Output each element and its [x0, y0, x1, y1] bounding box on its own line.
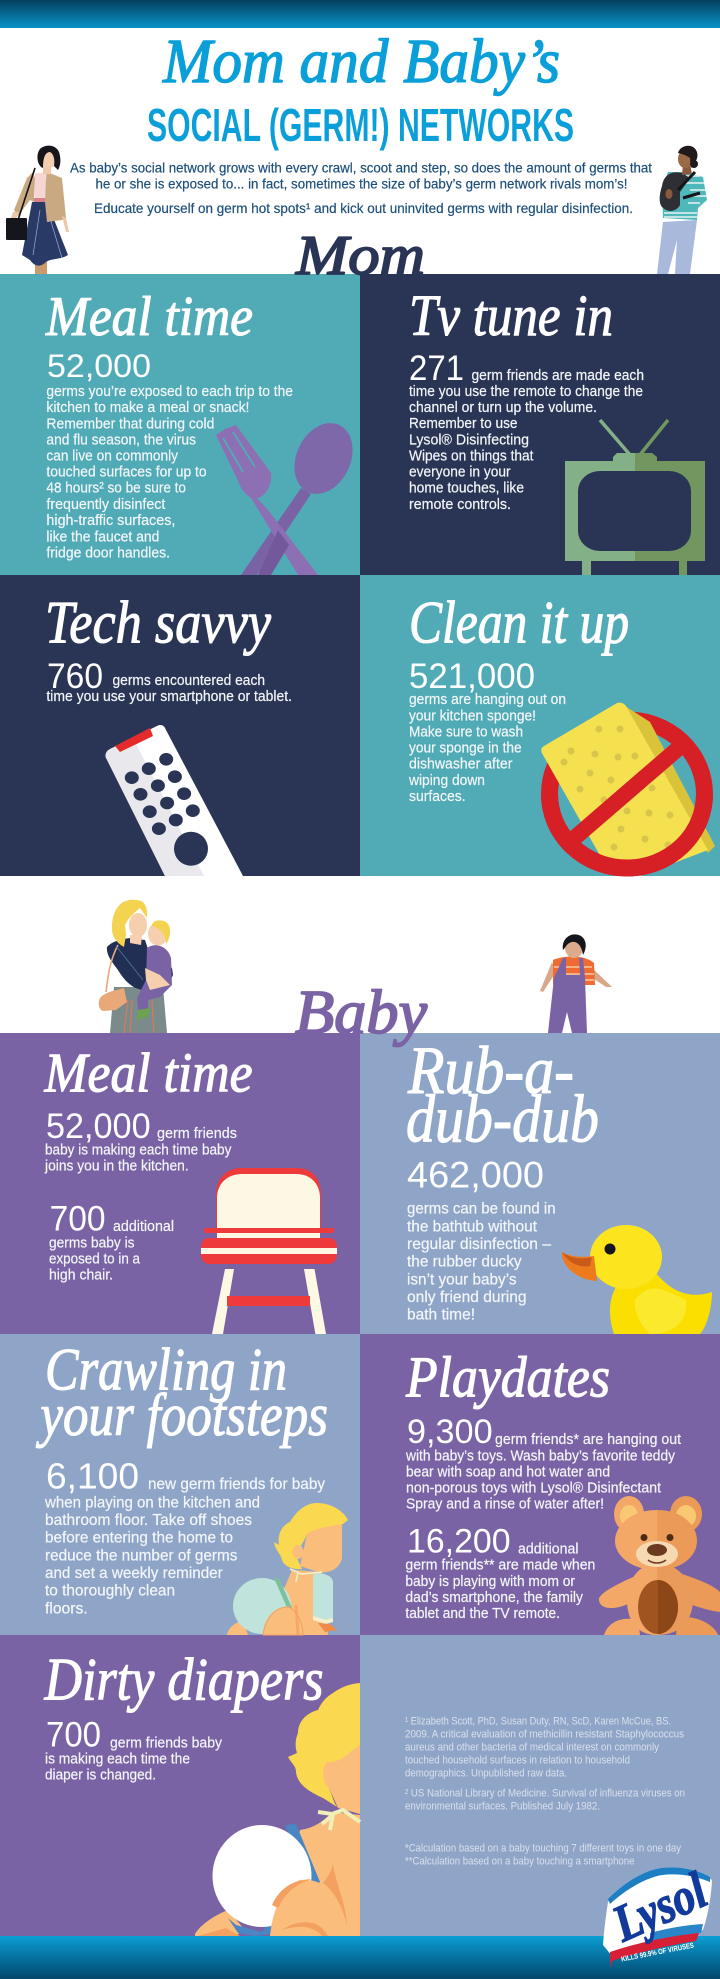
panel text: clean it up: germs are hanging out on	[409, 691, 566, 708]
illustration: toddler in overalls	[540, 934, 612, 1033]
panel text: clean it up: your sponge in the	[409, 740, 522, 757]
panel text: baby meal time: Meal time	[44, 1043, 252, 1105]
references: ¹ Elizabeth Scott, PhD, Susan Duty, RN, ScD, Karen McCue, BS.	[405, 1716, 671, 1728]
panel text: playdates: Spray and a rinse of water after!	[406, 1496, 604, 1513]
icon: rubber duck	[562, 1225, 712, 1334]
panel: rub-a-dub-dub background	[360, 1033, 720, 1334]
panel text: tv tune in: germ friends are made each	[472, 367, 644, 384]
panel text: crawling in your footsteps	[35, 1336, 328, 1617]
panel text: baby meal time: 52,000	[46, 1107, 151, 1146]
panel text: playdates: 16,200	[407, 1523, 511, 1561]
references: ² US National Library of Medicine. Survival of influenza viruses on	[405, 1787, 685, 1799]
panel text: playdates: tablet and the TV remote.	[405, 1605, 560, 1622]
panel text: playdates: 9,300	[407, 1413, 493, 1451]
panel text: tech savvy: Tech savvy	[45, 590, 271, 656]
illustration: crawling baby	[227, 1503, 348, 1635]
panel text: mom meal time	[45, 286, 293, 561]
panel text: baby meal time: baby is making each time baby	[45, 1141, 232, 1158]
references: 2009. A critical evaluation of methicillin resistant Staphylococcus	[405, 1729, 684, 1741]
panel text: crawling in your footsteps: new germ friends for baby	[148, 1476, 325, 1493]
panel: dirty diapers background	[0, 1635, 360, 1936]
illustration: woman with baby carrier	[657, 146, 707, 274]
panel: baby meal time background	[0, 1033, 360, 1334]
panel text: rub-a-dub-dub: the rubber ducky	[407, 1254, 522, 1271]
panel text: baby meal time: 700	[50, 1200, 106, 1239]
panel text: crawling in your footsteps: your footsteps	[35, 1382, 328, 1448]
references: aureus and other bacteria of medical interest on commonly	[405, 1742, 659, 1754]
panel text: tv tune in: everyone in your	[409, 464, 511, 481]
panel text: rub-a-dub-dub: only friend during	[407, 1289, 527, 1306]
icon: fork and spoon	[216, 414, 364, 575]
panel text: mom meal time: 48 hours² so be sure to	[46, 480, 186, 497]
panel: references background	[360, 1635, 720, 1936]
panel text: tv tune in: channel or turn up the volume.	[409, 399, 597, 416]
panel text: mom meal time: high-traffic surfaces,	[46, 512, 175, 529]
panel text: baby meal time: high chair.	[49, 1267, 113, 1284]
panel: playdates background	[360, 1334, 720, 1635]
panel text: dirty diapers: 700	[46, 1716, 101, 1755]
panel text: playdates: Playdates	[405, 1345, 610, 1410]
icon: television	[565, 420, 705, 575]
panel text: clean it up: 521,000	[409, 657, 535, 696]
panel text: tv tune in: Tv tune in	[409, 283, 613, 348]
panel text: dirty diapers: germ friends baby	[110, 1734, 222, 1751]
panel text: baby meal time: exposed to in a	[49, 1251, 141, 1268]
panel text: mom meal time: Remember that during cold	[46, 415, 214, 432]
references: demographics. Unpublished raw data.	[405, 1767, 567, 1779]
panel text: dirty diapers	[44, 1646, 323, 1784]
panel text: mom meal time: germs you’re exposed to each trip to the	[46, 383, 293, 400]
panel text: crawling in your footsteps: before entering the home to	[45, 1530, 233, 1547]
panel text: baby meal time: germ friends	[157, 1125, 237, 1142]
panel text: playdates	[405, 1345, 682, 1622]
panel text: rub-a-dub-dub: the bathtub without	[407, 1218, 538, 1235]
panel: mom meal time background	[0, 274, 360, 575]
references: **Calculation based on a baby touching a smartphone	[405, 1856, 634, 1868]
panel text: playdates: additional	[518, 1541, 578, 1558]
panel text: tech savvy: 760	[47, 657, 103, 696]
panel text: tv tune in	[409, 283, 644, 513]
icon: sponge with prohibition sign	[541, 703, 715, 876]
panel text: baby meal time: additional	[113, 1218, 174, 1235]
intro text	[70, 160, 652, 216]
panel text: crawling in your footsteps: Crawling in	[45, 1336, 287, 1402]
panel text: tv tune in: Wipes on things that	[409, 447, 534, 464]
panel text: tech savvy: germs encountered each	[112, 672, 265, 689]
panel text: clean it up	[408, 590, 629, 805]
title: Mom and Baby’s	[162, 28, 560, 96]
panel text: mom meal time: frequently disinfect	[46, 496, 166, 513]
panel text: crawling in your footsteps: when playing on the kitchen and	[44, 1494, 260, 1511]
panel text: crawling in your footsteps: bathroom floor. Take off shoes	[45, 1512, 252, 1529]
panel text: mom meal time: 52,000	[47, 348, 151, 384]
panel text: rub-a-dub-dub: dub-dub	[406, 1081, 599, 1157]
panel text: crawling in your footsteps: reduce the number of germs	[45, 1547, 237, 1564]
panel text: playdates: germ friends* are hanging out	[495, 1431, 682, 1448]
panel: tv tune in background	[360, 274, 720, 575]
panel text: rub-a-dub-dub	[406, 1032, 599, 1324]
references: touched household surfaces in relation to household	[405, 1754, 630, 1766]
panel text: crawling in your footsteps: floors.	[45, 1600, 88, 1617]
references	[405, 1716, 685, 1868]
references: environmental surfaces. Published July 1982.	[405, 1800, 600, 1812]
panel text: clean it up: Make sure to wash	[409, 723, 523, 740]
panel text: playdates: with baby’s toys. Wash baby’s favorite teddy	[405, 1447, 675, 1464]
logo: Lysol: KILLS 99.9% OF VIRUSES	[620, 1941, 695, 1964]
illustration: woman with handbag	[6, 146, 69, 274]
panel text: playdates: non-porous toys with Lysol® Disinfectant	[406, 1479, 662, 1496]
intro text: Educate yourself on germ hot spots¹ and kick out uninvited germs with regular disinfection.	[94, 200, 633, 216]
panel text: baby meal time	[44, 1043, 252, 1284]
illustration: baby with diaper	[195, 1683, 360, 1936]
icon: teddy bear	[599, 1496, 720, 1635]
panel text: crawling in your footsteps: to thoroughly clean	[45, 1583, 175, 1600]
panel text: rub-a-dub-dub: germs can be found in	[407, 1201, 556, 1218]
panel text: playdates: dad’s smartphone, the family	[405, 1589, 583, 1606]
icon: high chair	[201, 1168, 337, 1334]
panel text: dirty diapers: is making each time the	[45, 1750, 190, 1767]
panel text: tv tune in: Remember to use	[409, 415, 518, 432]
panel text: playdates: bear with soap and hot water and	[406, 1463, 610, 1480]
panel text: mom meal time: and flu season, the virus	[46, 431, 196, 448]
panel text: tv tune in: Lysol® Disinfecting	[409, 431, 529, 448]
section heading: Mom: Mom	[295, 225, 425, 287]
intro text: he or she is exposed to... in fact, sometimes the size of baby’s germ network rivals mom’s!	[96, 176, 628, 192]
title	[147, 28, 574, 151]
panel: crawling background	[0, 1334, 360, 1635]
top gradient bar	[0, 0, 720, 28]
illustration: mom holding baby	[99, 900, 173, 1033]
panel text: rub-a-dub-dub: Rub-a-	[407, 1032, 574, 1108]
panel text: mom meal time: fridge door handles.	[46, 544, 170, 561]
panel text: mom meal time: can live on commonly	[46, 448, 178, 465]
panel text: dirty diapers: Dirty diapers	[44, 1646, 323, 1712]
panel text: playdates: germ friends** are made when	[405, 1557, 595, 1574]
icon: remote control	[106, 725, 243, 876]
panel text: clean it up: Clean it up	[409, 590, 629, 656]
panel text: tech savvy: time you use your smartphone or tablet.	[46, 688, 292, 705]
panel text: tv tune in: 271	[409, 349, 464, 388]
panel text: tv tune in: home touches, like	[409, 480, 524, 497]
panel text: clean it up: wiping down	[408, 772, 485, 789]
panel text: clean it up: surfaces.	[409, 788, 466, 805]
panel text: clean it up: dishwasher after	[409, 756, 512, 773]
panel text: rub-a-dub-dub: isn’t your baby’s	[407, 1271, 516, 1288]
panel text: mom meal time: Meal time	[45, 286, 253, 348]
panel text: clean it up: your kitchen sponge!	[409, 707, 536, 724]
panel text: rub-a-dub-dub: 462,000	[407, 1155, 544, 1196]
bottom gradient bar	[0, 1936, 720, 1979]
panel text: crawling in your footsteps: 6,100	[46, 1455, 139, 1496]
references: *Calculation based on a baby touching 7 different toys in one day	[405, 1843, 681, 1855]
panel text: crawling in your footsteps: and set a weekly reminder	[45, 1565, 223, 1582]
panel text: mom meal time: kitchen to make a meal or snack!	[46, 399, 249, 416]
panel text: mom meal time: like the faucet and	[46, 528, 159, 545]
panel text: baby meal time: joins you in the kitchen.	[44, 1158, 189, 1175]
panel text: rub-a-dub-dub: bath time!	[407, 1307, 475, 1324]
panel: tech savvy background	[0, 575, 360, 876]
panel text: mom meal time: touched surfaces for up to	[46, 464, 207, 481]
panel text: playdates: baby is playing with mom or	[405, 1573, 575, 1590]
panel: clean it up background	[360, 575, 720, 876]
panel text: tv tune in: time you use the remote to change the	[409, 383, 643, 400]
intro text: As baby’s social network grows with every crawl, scoot and step, so does the amount of germs that	[70, 160, 652, 176]
panel text: tech savvy	[45, 590, 292, 705]
section heading: Baby: Baby	[295, 979, 427, 1047]
panel text: baby meal time: germs baby is	[49, 1234, 134, 1251]
panel text: rub-a-dub-dub: regular disinfection –	[407, 1236, 551, 1253]
panel text: tv tune in: remote controls.	[409, 496, 511, 513]
panel text: dirty diapers: diaper is changed.	[45, 1767, 156, 1784]
